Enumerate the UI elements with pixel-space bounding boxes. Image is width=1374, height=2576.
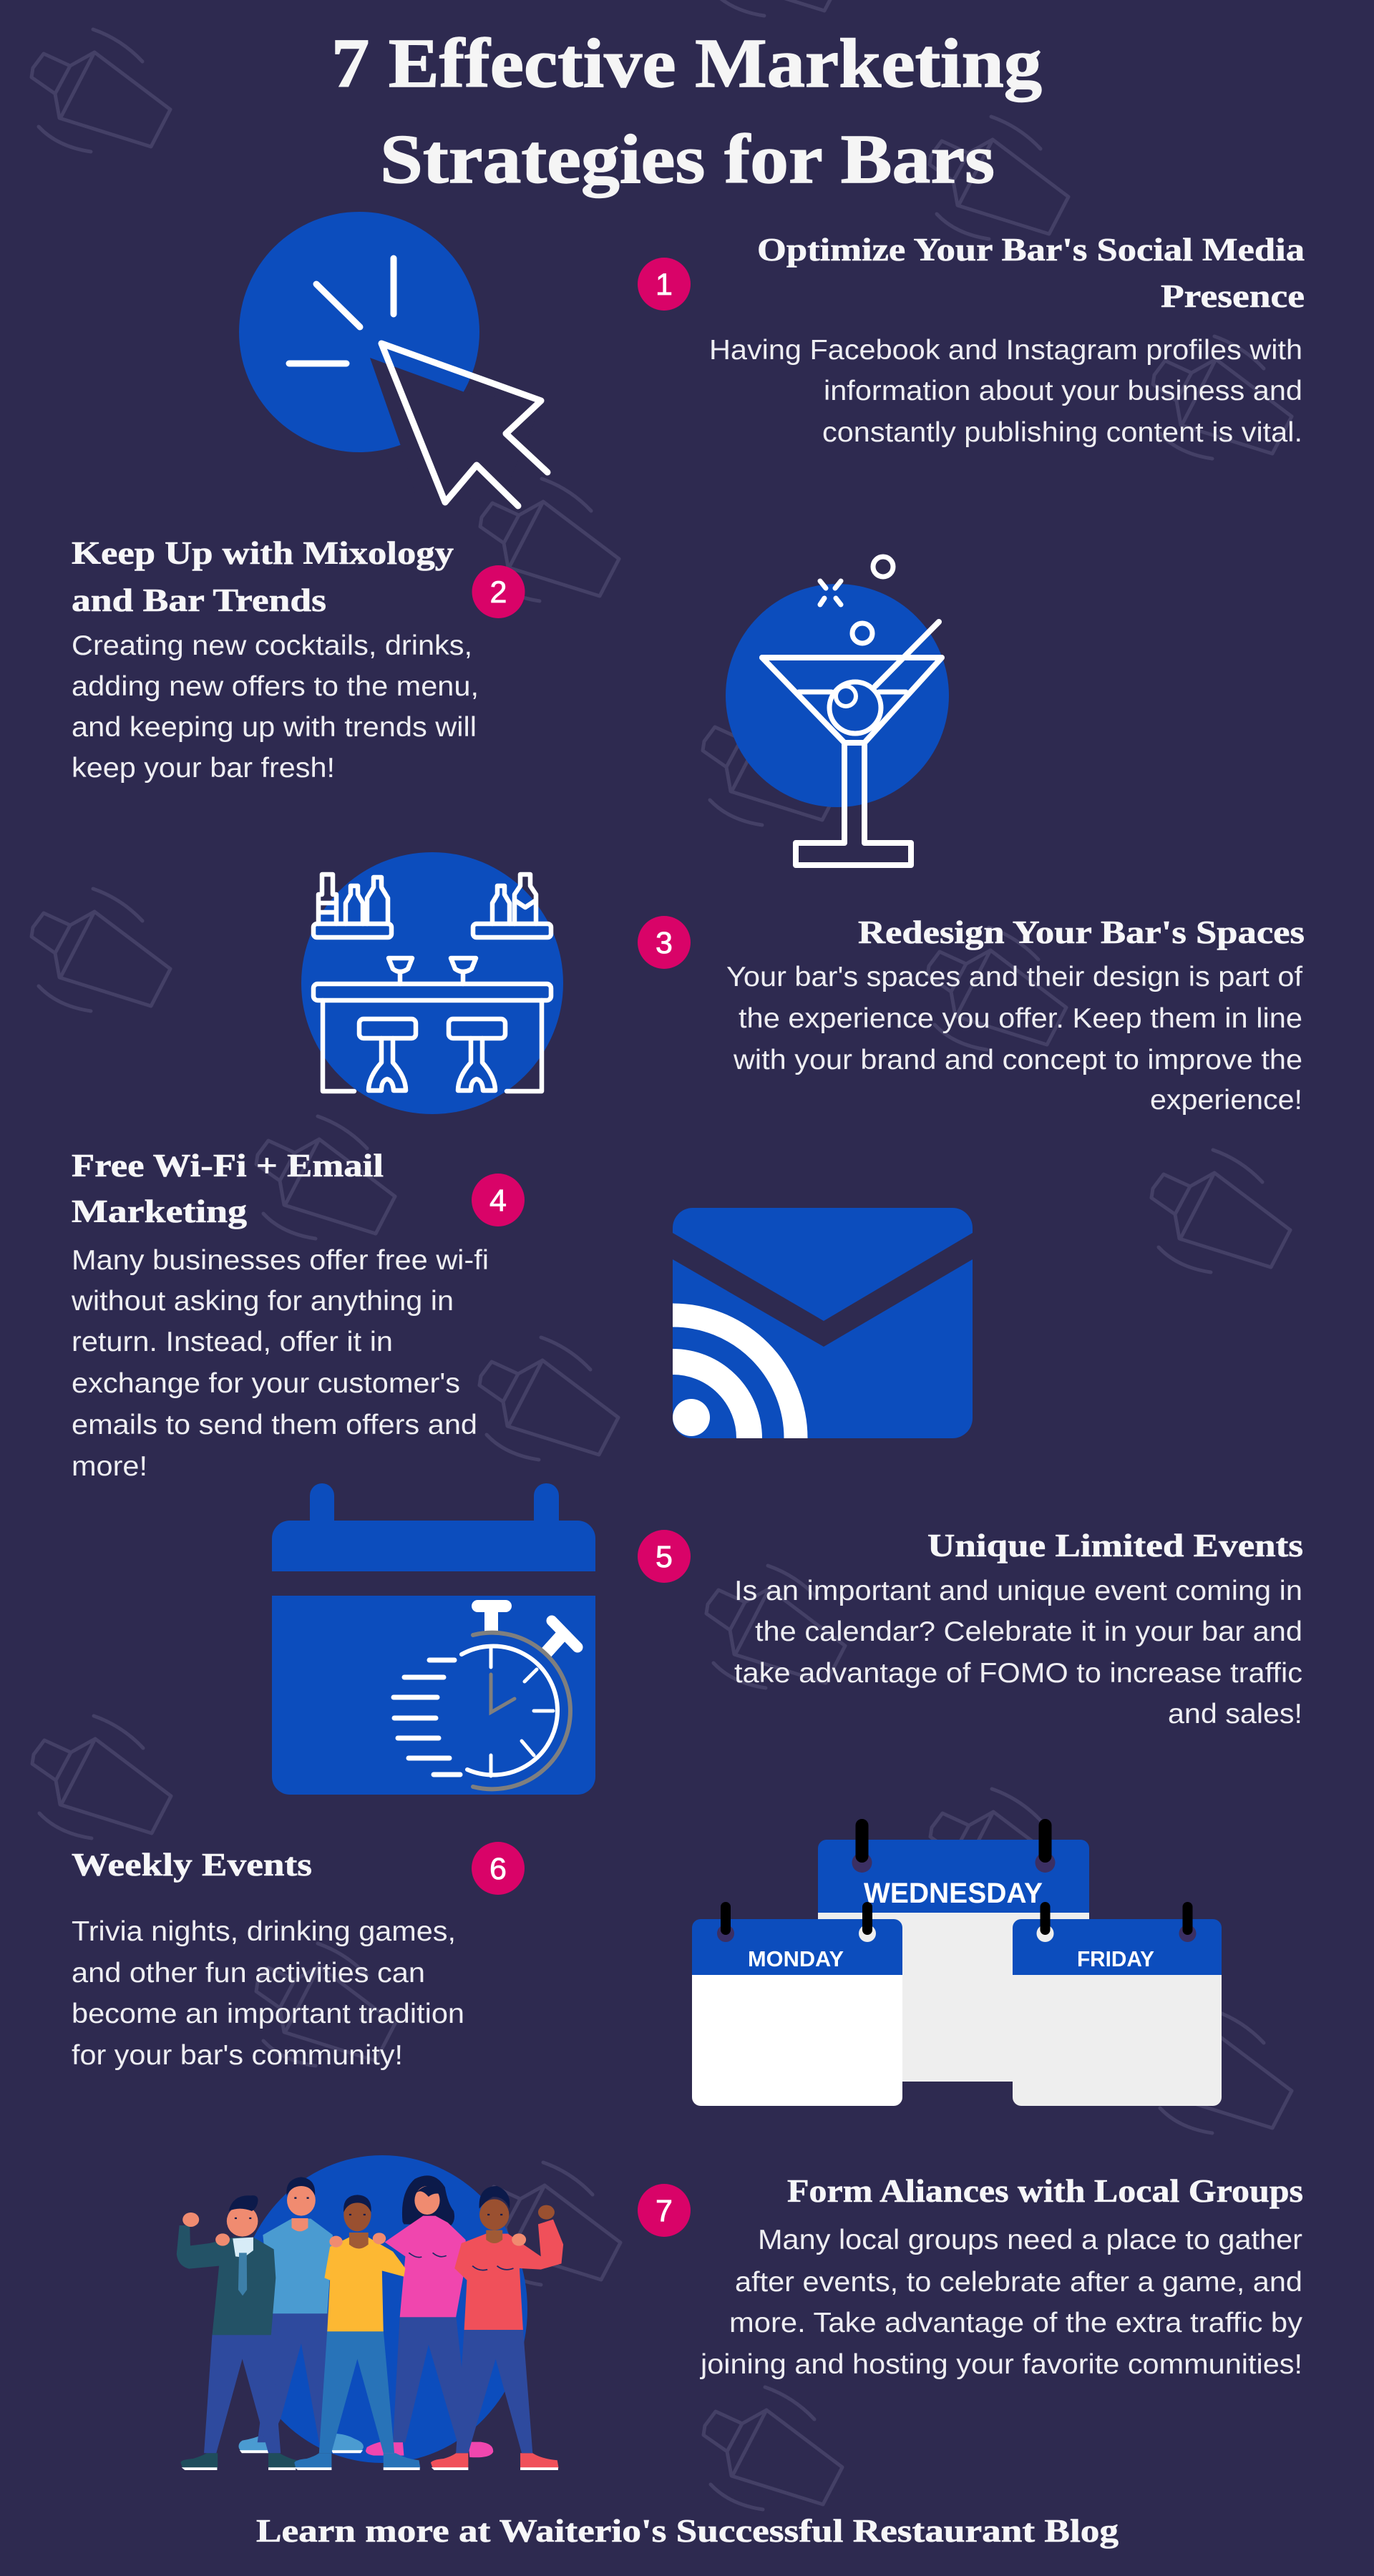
body text 5: and sales! xyxy=(1168,1699,1302,1729)
panel: strategy 1 xyxy=(239,212,1305,506)
body text 5: the calendar? Celebrate it in your bar and xyxy=(755,1616,1302,1647)
title xyxy=(331,25,1042,198)
body text 6: become an important tradition xyxy=(72,1999,464,2029)
body text 7 xyxy=(700,2225,1303,2380)
body text 3: the experience you offer. Keep them in line xyxy=(739,1003,1302,1034)
panel: strategy 2 xyxy=(72,535,949,865)
body text 1: constantly publishing content is vital. xyxy=(822,417,1302,448)
body text 2 xyxy=(72,630,479,784)
calendar: friday: FRIDAY xyxy=(1077,1946,1154,1971)
heading 4 xyxy=(72,1148,384,1229)
number badge 3 xyxy=(638,916,691,969)
number badge 4: 4 xyxy=(489,1184,507,1218)
body text 2: and keeping up with trends will xyxy=(72,712,477,743)
panel: strategy 5 xyxy=(272,1483,1303,1795)
number badge 7 xyxy=(638,2184,691,2237)
number badge 6 xyxy=(472,1842,525,1895)
icon: envelope with wifi xyxy=(673,1208,973,1438)
icon: bar counter xyxy=(301,852,563,1114)
heading 1: Presence xyxy=(1161,278,1305,314)
person: pink shirt xyxy=(366,2175,493,2457)
body text 7: more. Take advantage of the extra traffic by xyxy=(729,2308,1303,2338)
number badge 1: 1 xyxy=(656,268,673,302)
heading 7: Form Aliances with Local Groups xyxy=(787,2173,1303,2209)
calendar: wednesday: WEDNESDAY xyxy=(864,1878,1043,1909)
body text 5: take advantage of FOMO to increase traffic xyxy=(734,1658,1302,1689)
calendar: friday xyxy=(1013,1902,1222,2106)
number badge 2 xyxy=(472,565,525,618)
heading 2 xyxy=(72,535,454,618)
body text 4 xyxy=(71,1245,489,1482)
body text 4: Many businesses offer free wi-fi xyxy=(72,1245,489,1276)
icon: martini glass xyxy=(726,557,949,865)
number badge 1 xyxy=(638,258,691,311)
number badge 5 xyxy=(638,1530,691,1583)
calendar: monday: MONDAY xyxy=(748,1946,844,1971)
heading 3: Redesign Your Bar's Spaces xyxy=(858,914,1305,950)
body text 1: Having Facebook and Instagram profiles with xyxy=(709,335,1302,366)
icon: calendar with stopwatch xyxy=(272,1483,595,1795)
body text 3: experience! xyxy=(1150,1085,1302,1116)
person: yellow shirt xyxy=(294,2195,420,2470)
body text 6: and other fun activities can xyxy=(72,1958,425,1989)
body text 7: Many local groups need a place to gather xyxy=(758,2225,1302,2255)
body text 4: exchange for your customer's xyxy=(72,1368,460,1399)
body text 4: emails to send them offers and xyxy=(72,1410,477,1440)
body text 4: without asking for anything in xyxy=(71,1286,454,1317)
person: blue shirt xyxy=(238,2177,364,2453)
body text 5: Is an important and unique event coming in xyxy=(734,1576,1302,1606)
body text 1 xyxy=(709,335,1302,448)
panel: strategy 4 xyxy=(71,1148,973,1482)
heading 1: Optimize Your Bar's Social Media xyxy=(757,232,1305,268)
body text 3 xyxy=(726,962,1302,1116)
panel: strategy 3 xyxy=(301,852,1305,1116)
body text 3: Your bar's spaces and their design is part of xyxy=(726,962,1302,992)
title: 7 Effective Marketing xyxy=(331,25,1042,102)
number badge 7: 7 xyxy=(656,2194,673,2228)
heading 4: Free Wi-Fi + Email xyxy=(72,1148,384,1184)
person: coral shirt xyxy=(431,2186,563,2470)
number badge 3: 3 xyxy=(656,926,673,960)
footer call to action: Learn more at Waiterio's Successful Restaurant Blog xyxy=(256,2513,1119,2549)
body text 6 xyxy=(72,1916,464,2071)
number badge 5: 5 xyxy=(656,1540,673,1574)
body text 7: joining and hosting your favorite communities! xyxy=(700,2349,1302,2380)
body text 6: for your bar's community! xyxy=(72,2040,403,2071)
body text 5 xyxy=(734,1576,1302,1729)
body text 4: return. Instead, offer it in xyxy=(72,1327,393,1357)
panel: strategy 7 xyxy=(177,2155,1303,2470)
heading 2: Keep Up with Mixology xyxy=(72,535,454,571)
panel: strategy 6 xyxy=(72,1819,1222,2106)
calendar: monday xyxy=(692,1902,902,2106)
heading 4: Marketing xyxy=(72,1194,248,1229)
body text 2: adding new offers to the menu, xyxy=(72,671,479,702)
number badge 6: 6 xyxy=(489,1852,507,1886)
body text 2: Creating new cocktails, drinks, xyxy=(72,630,472,661)
body text 1: information about your business and xyxy=(824,376,1302,406)
calendar: wednesday xyxy=(818,1819,1089,2082)
body text 7: after events, to celebrate after a game, and xyxy=(735,2267,1302,2298)
body text 3: with your brand and concept to improve the xyxy=(733,1045,1302,1075)
number badge 4 xyxy=(472,1174,525,1226)
body text 2: keep your bar fresh! xyxy=(72,753,335,784)
heading 2: and Bar Trends xyxy=(72,582,326,618)
body text 4: more! xyxy=(72,1451,147,1482)
heading 5: Unique Limited Events xyxy=(927,1528,1303,1563)
icon: group of people xyxy=(177,2155,563,2470)
heading 1 xyxy=(757,232,1305,314)
body text 6: Trivia nights, drinking games, xyxy=(72,1916,456,1947)
icon: weekly calendars xyxy=(692,1819,1222,2106)
title: Strategies for Bars xyxy=(380,121,995,198)
icon: cursor click xyxy=(239,212,547,506)
person: green shirt xyxy=(177,2195,297,2470)
heading 6: Weekly Events xyxy=(72,1847,312,1883)
number badge 2: 2 xyxy=(490,575,507,610)
